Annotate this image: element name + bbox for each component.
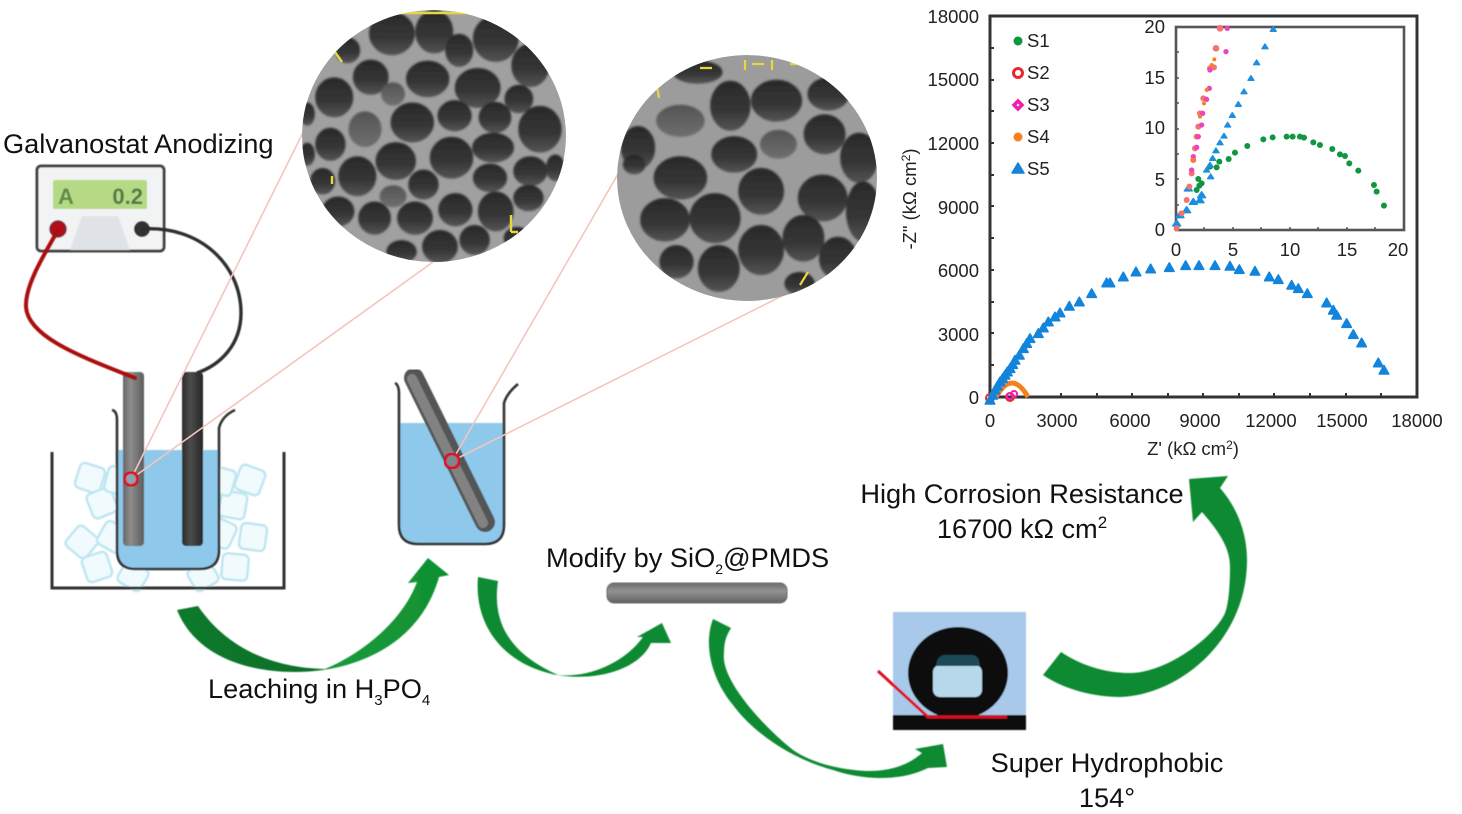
- inset y labels: 15: [1144, 67, 1165, 88]
- label: Super Hydrophobic 154°: 154°: [1079, 782, 1135, 813]
- inset frame: [1176, 27, 1404, 230]
- label: Super Hydrophobic 154°: Super Hydrophobic: [991, 747, 1223, 778]
- y axis labels: 9000: [938, 197, 979, 218]
- heading: Galvanostat Anodizing: Galvanostat Anodizing: [3, 128, 274, 159]
- icon: ammeter: A: [58, 184, 74, 209]
- legend: S3: [1027, 94, 1050, 115]
- series S5 inset: [1173, 27, 1276, 226]
- legend: S4: [1027, 126, 1050, 147]
- series S3 inset: [1189, 26, 1230, 173]
- y axis labels: 12000: [928, 133, 979, 154]
- zoom guide lines: [131, 62, 800, 479]
- label: High Corrosion Resistance: High Corrosion Resistance: [860, 478, 1184, 509]
- icon: leaching beaker with tilted rod: [395, 378, 518, 544]
- red ring marker on tilted rod: [445, 454, 459, 468]
- legend: S2: [1027, 62, 1050, 83]
- series S1 inset: [1194, 134, 1387, 209]
- inset y labels: 10: [1144, 117, 1165, 138]
- x axis labels: 15000: [1316, 410, 1368, 431]
- inset x labels: 15: [1337, 239, 1357, 260]
- beaker water: [117, 450, 218, 568]
- icon: ammeter: [37, 166, 164, 251]
- icon: modified rod: [607, 583, 787, 603]
- chart: Nyquist plot: [899, 6, 1443, 459]
- label: Super Hydrophobic 154°: [991, 747, 1223, 813]
- arrow: leaching to modify: [478, 577, 671, 677]
- x axis labels: [985, 410, 1443, 431]
- x axis labels: 18000: [1391, 410, 1443, 431]
- legend: [1012, 30, 1050, 179]
- label: Leaching in H3PO4: Leaching in H: [208, 673, 374, 704]
- arrow: hydrophobic to corrosion resistance: [1043, 476, 1247, 697]
- y axis title: ): [899, 148, 920, 155]
- x axis labels: 12000: [1245, 410, 1297, 431]
- inset x labels: 0: [1171, 239, 1181, 260]
- inset x labels: 10: [1280, 239, 1300, 260]
- y axis labels: 15000: [928, 69, 979, 90]
- inset y labels: 20: [1144, 16, 1165, 37]
- label: Leaching in H3PO4: 4: [422, 692, 430, 709]
- label: High Corrosion Resistance: [860, 478, 1184, 544]
- substrate: [893, 715, 1026, 730]
- inset y labels: 0: [1155, 219, 1165, 240]
- red wire: [26, 230, 135, 378]
- icon: ammeter: 0.2: [112, 184, 143, 209]
- series S4 inset: [1191, 57, 1216, 162]
- y axis title: -Z" (kΩ cm: [899, 161, 920, 250]
- tick marks: [990, 48, 1381, 397]
- x axis title: Z' (kΩ cm: [1147, 438, 1226, 459]
- ice cubes: [64, 462, 268, 593]
- water droplet contact angle image: [878, 612, 1026, 730]
- label: Modify by SiO2@PMDS: 2: [715, 561, 723, 577]
- arrow: modify to hydrophobic: [709, 619, 947, 778]
- y axis labels: 18000: [928, 6, 979, 27]
- inset x labels: 5: [1228, 239, 1238, 260]
- droplet highlight: [933, 665, 982, 697]
- inset x labels: [1171, 239, 1408, 260]
- gray electrode: [123, 372, 144, 546]
- inset data: [1173, 25, 1387, 231]
- x axis labels: 0: [985, 410, 995, 431]
- droplet: [908, 627, 1008, 719]
- legend: S5: [1027, 158, 1050, 179]
- y axis labels: 6000: [938, 260, 979, 281]
- contact angle lines: [878, 671, 1007, 717]
- series S5 main: [985, 261, 1389, 404]
- red ring marker on electrode: [124, 472, 138, 486]
- SEM image: pores circle 2: [617, 55, 878, 301]
- ice bath container: [52, 452, 284, 588]
- x axis labels: 6000: [1109, 410, 1151, 431]
- legend: S1: [1027, 30, 1050, 51]
- label: Modify by SiO2@PMDS: @PMDS: [723, 542, 829, 573]
- label: High Corrosion Resistance: 16700 kΩ cm: [937, 513, 1098, 544]
- near-origin series S2 S3 S4: [986, 383, 1028, 402]
- black wire: [142, 229, 241, 373]
- x axis title: ): [1233, 438, 1239, 459]
- beaker outline: [112, 410, 235, 569]
- dark electrode: [182, 372, 203, 546]
- inset x labels: 20: [1388, 239, 1408, 260]
- inset y labels: [1144, 16, 1165, 240]
- x axis labels: 3000: [1036, 410, 1078, 431]
- label: Leaching in H3PO4: 3: [374, 692, 383, 709]
- y axis labels: 3000: [938, 324, 979, 345]
- inset ticks: [1176, 52, 1375, 230]
- main plot frame: [990, 16, 1417, 397]
- y axis labels: [928, 6, 979, 408]
- inset plot: [1144, 16, 1408, 260]
- icon: ice bath with beaker and electrodes: [52, 372, 284, 593]
- y axis title: 2: [899, 154, 913, 161]
- label: Modify by SiO2@PMDS: Modify by SiO: [546, 542, 715, 573]
- x axis labels: 9000: [1179, 410, 1221, 431]
- label: High Corrosion Resistance: 2: [1098, 513, 1107, 532]
- x axis title: 2: [1226, 438, 1233, 452]
- arrow: anodizing to leaching: [177, 558, 449, 672]
- y axis labels: 0: [969, 387, 979, 408]
- SEM image: pores circle 1: [302, 10, 566, 262]
- label: Leaching in H3PO4: PO: [383, 673, 422, 704]
- inset y labels: 5: [1155, 169, 1165, 190]
- series S2 inset: [1174, 25, 1223, 231]
